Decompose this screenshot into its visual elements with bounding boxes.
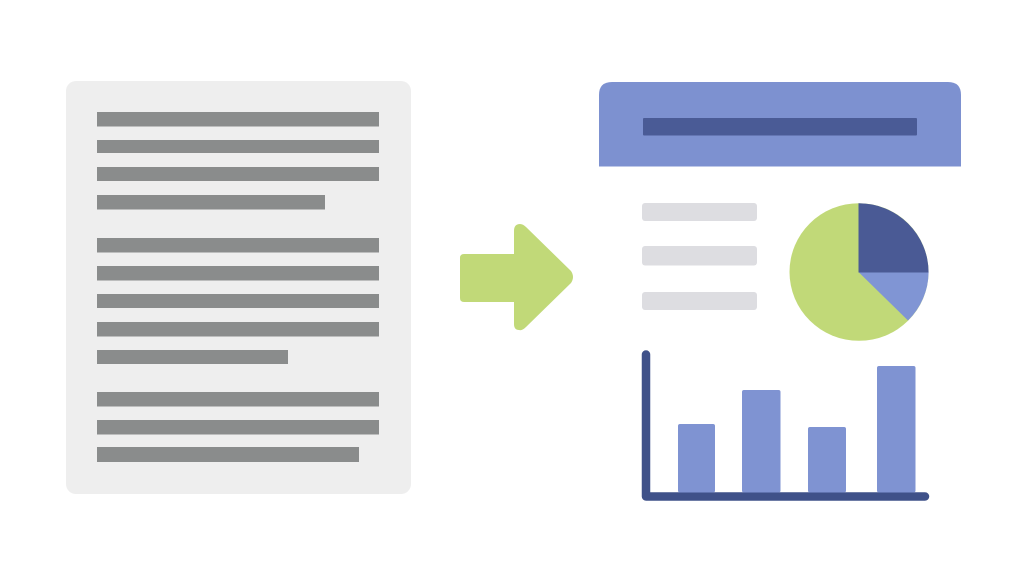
text lines: first paragraph bbox=[97, 112, 379, 210]
pie chart bbox=[790, 203, 929, 341]
arrow: transformation bbox=[460, 224, 573, 330]
report header banner bbox=[599, 82, 961, 166]
panel: visual report bbox=[599, 82, 961, 496]
bars bbox=[678, 366, 916, 492]
bar chart bbox=[646, 354, 925, 496]
summary lines bbox=[642, 203, 757, 310]
text lines: second paragraph bbox=[97, 238, 379, 364]
chart axes bbox=[646, 354, 925, 496]
text lines: third paragraph bbox=[97, 392, 379, 462]
header title bar bbox=[643, 118, 917, 136]
panel: plain text document bbox=[66, 81, 411, 494]
